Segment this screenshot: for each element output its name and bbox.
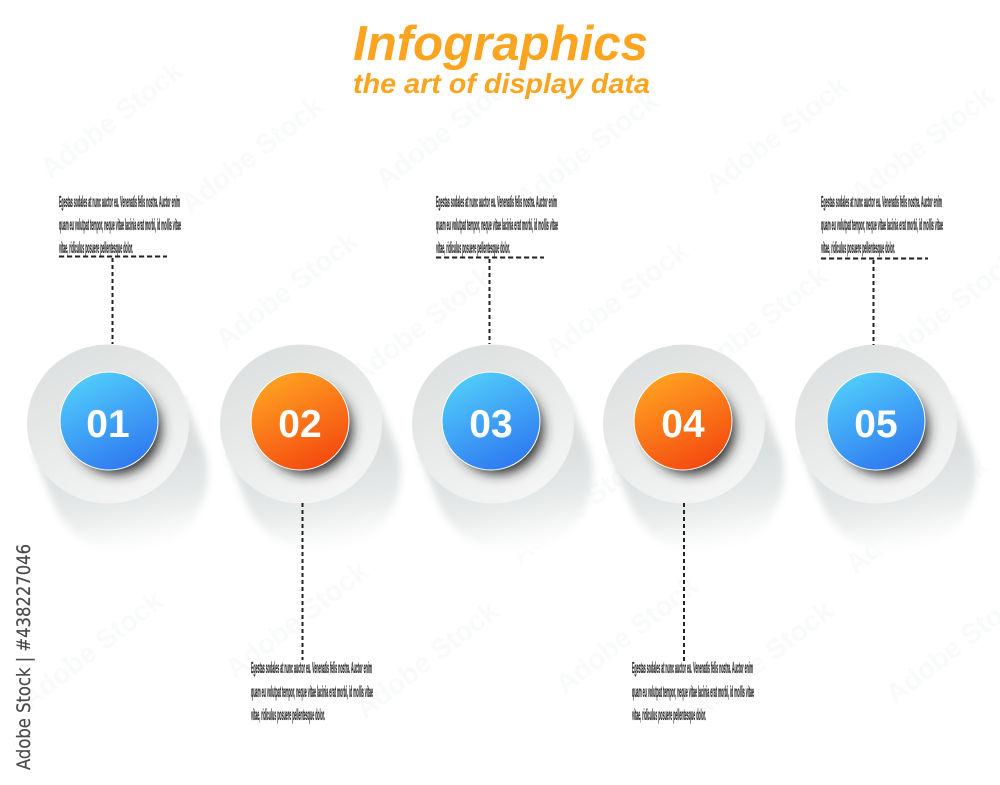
watermark pattern: Adobe Stock: [15, 585, 169, 715]
button 05: [827, 372, 925, 470]
stock id label: Adobe Stock | #438227046: [13, 544, 35, 770]
watermark pattern: Adobe Stock: [220, 555, 374, 685]
dotted leader 03: [488, 259, 490, 344]
callout 04: [632, 503, 754, 724]
button shadow 04: [645, 384, 735, 474]
watermark pattern: Adobe Stock: [350, 595, 504, 725]
button shadow 01: [71, 384, 161, 474]
title: [353, 17, 650, 99]
number 03: 03: [469, 403, 513, 446]
watermark pattern: Adobe Stock: [505, 440, 659, 570]
button 04: [634, 372, 732, 470]
number 02: 02: [278, 403, 322, 446]
callout 02: [251, 503, 373, 724]
long shadow 02: [226, 394, 401, 553]
watermark pattern: Adobe Stock: [35, 55, 189, 185]
number 01: 01: [86, 403, 130, 446]
infographic canvas: vitae, ridiculus posuere pellentesque dolor.: [251, 707, 325, 724]
long shadow 01: [33, 394, 208, 553]
subheading: the art of display data: [353, 68, 650, 99]
infographic canvas: vitae, ridiculus posuere pellentesque dolor.: [632, 707, 706, 724]
infographic canvas: Egestas sodales at nunc auctor eu. Venenatis felis nostra. Auctor enim: [59, 194, 180, 211]
long shadow 04: [609, 394, 784, 553]
number 05: 05: [854, 403, 898, 446]
watermark pattern: Adobe Stock: [210, 225, 364, 355]
dotted leader 01: [112, 258, 114, 344]
watermark pattern: Adobe Stock: [840, 450, 994, 580]
button shadow 02: [262, 384, 352, 474]
watermark pattern: Adobe Stock: [845, 80, 999, 210]
heading: Infographics: Infographics: [353, 17, 648, 71]
watermark pattern: Adobe Stock: [680, 260, 834, 390]
infographic canvas: quam eu volutpat tempor, neque vitae lacinia erat morbi, id mollis vitae: [436, 217, 558, 234]
callout 03: [436, 194, 558, 344]
text block 03: [436, 194, 558, 257]
watermark pattern: Adobe Stock: [510, 85, 664, 215]
step 04: [603, 344, 784, 553]
dashed rule 01: [59, 256, 167, 258]
dotted leader 02: [302, 503, 304, 660]
text block 02: [251, 660, 373, 724]
disc 02: [220, 344, 382, 504]
step 02: [220, 344, 401, 553]
infographic canvas: Egestas sodales at nunc auctor eu. Venenatis felis nostra. Auctor enim: [436, 194, 557, 211]
button shadow 03: [453, 384, 543, 474]
button 03: [442, 372, 540, 470]
infographic canvas: quam eu volutpat tempor, neque vitae lacinia erat morbi, id mollis vitae: [59, 217, 181, 234]
callout 05: [821, 194, 943, 345]
dashed rule 05: [821, 258, 928, 260]
step 05: [795, 344, 976, 553]
button shadow 05: [838, 384, 928, 474]
button 02: [251, 372, 349, 470]
watermark pattern: Adobe Stock: [540, 235, 694, 365]
disc 04: [603, 344, 765, 504]
text block 01: [59, 194, 181, 257]
callout 01: [59, 194, 181, 344]
long shadow 03: [418, 394, 593, 553]
text block 04: [632, 660, 754, 724]
long shadow 05: [801, 394, 976, 553]
text block 05: [821, 194, 943, 257]
disc 01: [27, 344, 189, 504]
infographic canvas: vitae, ridiculus posuere pellentesque dolor.: [436, 240, 510, 257]
watermark pattern: Adobe Stock: [370, 65, 524, 195]
dashed rule 03: [436, 256, 544, 258]
infographic canvas: quam eu volutpat tempor, neque vitae lacinia erat morbi, id mollis vitae: [251, 684, 373, 701]
watermark pattern: Adobe Stock: [700, 70, 854, 200]
disc 05: [795, 344, 957, 504]
step 03: [412, 344, 593, 553]
watermark pattern: Adobe Stock: [550, 570, 704, 700]
dotted leader 04: [683, 503, 685, 664]
button 01: [60, 372, 158, 470]
watermark pattern: Adobe Stock: [685, 595, 839, 725]
infographic canvas: Egestas sodales at nunc auctor eu. Venenatis felis nostra. Auctor enim: [251, 660, 372, 677]
disc 03: [412, 344, 574, 504]
number 04: 04: [661, 403, 705, 446]
watermark pattern: Adobe Stock: [345, 260, 499, 390]
watermark pattern: Adobe Stock: [175, 90, 329, 220]
infographic canvas: vitae, ridiculus posuere pellentesque dolor.: [59, 240, 133, 257]
dotted leader 05: [872, 260, 874, 345]
step 01: [27, 344, 208, 553]
